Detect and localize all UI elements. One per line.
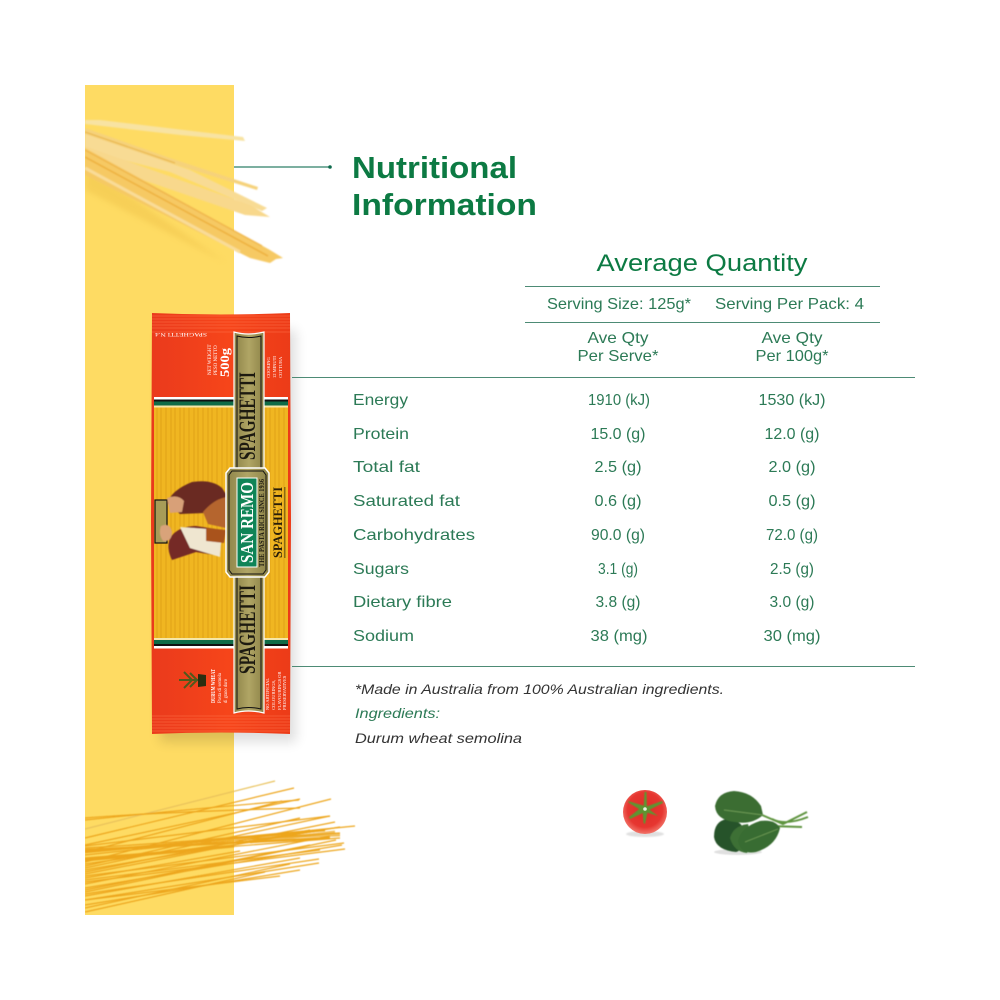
upside-down product name: SPAGHETTI N.4 — [155, 331, 207, 337]
weight text — [208, 344, 232, 377]
serving info: Serving Per Pack: 4 — [715, 296, 864, 313]
footnotes: Durum wheat semolina — [355, 730, 522, 746]
heading: Nutritional — [352, 150, 517, 185]
San Remo badge: SAN REMO — [237, 482, 257, 563]
nutrient labels: Protein — [353, 426, 409, 443]
values: per 100g: 2.5 (g) — [770, 561, 814, 578]
connector line with dot — [234, 165, 332, 169]
illustration: monks with pasta — [160, 481, 228, 560]
small SPAGHETTI text: SPAGHETTI — [270, 487, 285, 558]
footnotes: *Made in Australia from 100% Australian ingredients. — [355, 681, 724, 697]
values: per serve — [588, 392, 650, 645]
nutrient labels: Total fat — [353, 459, 421, 476]
nutrient labels: Sodium — [353, 628, 414, 645]
nutrient labels: Dietary fibre — [353, 594, 452, 611]
spaghetti window — [154, 407, 288, 638]
durum wheat icon and text: di grano duro — [224, 679, 229, 703]
no artificial note: FLAVOURINGS OR — [277, 671, 282, 710]
nutrient labels: Carbohydrates — [353, 527, 475, 544]
heading — [352, 150, 537, 222]
values: per 100g: 2.0 (g) — [768, 459, 816, 476]
column headings — [578, 330, 828, 365]
values: per serve: 1910 (kJ) — [588, 392, 650, 409]
values: per serve: 3.8 (g) — [596, 594, 640, 611]
package shadow — [160, 330, 296, 742]
values: per serve: 90.0 (g) — [591, 527, 645, 544]
top green stripe — [154, 397, 288, 408]
label text: SPAGHETTI upper: SPAGHETTI — [235, 372, 260, 460]
footnotes — [355, 681, 724, 746]
durum wheat icon and text: Pasta di semola — [218, 672, 223, 703]
column headings: Ave Qty — [588, 330, 648, 347]
values: per 100g: 1530 (kJ) — [758, 392, 826, 409]
nutrient labels: Energy — [353, 392, 408, 409]
values: per 100g: 3.0 (g) — [770, 594, 814, 611]
noodle lines — [157, 407, 284, 638]
label text: SPAGHETTI lower: SPAGHETTI — [235, 585, 260, 674]
values: per serve: 0.6 (g) — [594, 493, 642, 510]
values: per 100g: 0.5 (g) — [768, 493, 816, 510]
San Remo badge: THE PASTA RICH SINCE 1936 — [258, 479, 266, 567]
package red body — [151, 313, 291, 734]
left olive label behind monks — [155, 500, 167, 543]
column headings: Per 100g* — [756, 348, 828, 365]
cooking notes — [266, 356, 283, 378]
table rules — [292, 286, 915, 666]
weight text: NET WEIGHT — [208, 344, 213, 375]
column headings: Per Serve* — [578, 348, 658, 365]
values: per 100g: 30 (mg) — [764, 628, 820, 645]
yellow background panel — [85, 85, 234, 915]
table header: average quantity: Average Quantity — [596, 250, 808, 277]
icon: spinach leaves — [714, 791, 808, 855]
no artificial note — [265, 671, 287, 710]
column headings: Ave Qty — [762, 330, 822, 347]
no artificial note: NO ARTIFICIAL — [265, 678, 270, 710]
cooking notes: COTTURA — [278, 356, 283, 378]
San Remo badge — [226, 468, 269, 577]
cooking notes: COOKING — [266, 357, 271, 378]
nutrient labels: Saturated fat — [353, 493, 461, 510]
durum wheat icon and text: DURUM WHEAT — [211, 669, 217, 703]
icon: tomato — [623, 790, 667, 837]
values: per 100g: 12.0 (g) — [764, 426, 820, 443]
image: uncooked spaghetti strands, top — [85, 120, 283, 263]
values: per 100g — [758, 392, 826, 645]
nutrient labels — [353, 392, 475, 645]
bottom green stripe — [154, 638, 288, 648]
cooking notes: 12 MINUTI — [272, 356, 277, 378]
footnotes: Ingredients: — [355, 705, 440, 721]
values: per serve: 3.1 (g) — [598, 561, 638, 578]
values: per serve: 38 (mg) — [590, 628, 648, 645]
serving info: Serving Size: 125g* — [547, 296, 691, 313]
serving info — [547, 296, 864, 313]
no artificial note: COLOURINGS, — [271, 680, 277, 710]
nutrient labels: Sugars — [353, 561, 409, 578]
crimp texture on ends — [152, 316, 290, 731]
product package: San Remo spaghetti — [151, 313, 296, 742]
no artificial note: PRESERVATIVES — [282, 675, 287, 710]
weight text: 500g — [217, 347, 232, 377]
values: per serve: 15.0 (g) — [590, 426, 646, 443]
heading: Information — [352, 187, 537, 222]
image: uncooked spaghetti strands, bottom — [85, 781, 355, 912]
values: per 100g: 72.0 (g) — [766, 527, 818, 544]
values: per serve: 2.5 (g) — [594, 459, 642, 476]
olive vertical label — [234, 332, 264, 713]
durum wheat icon and text — [179, 669, 229, 703]
weight text: PESO NETTO — [214, 345, 219, 375]
